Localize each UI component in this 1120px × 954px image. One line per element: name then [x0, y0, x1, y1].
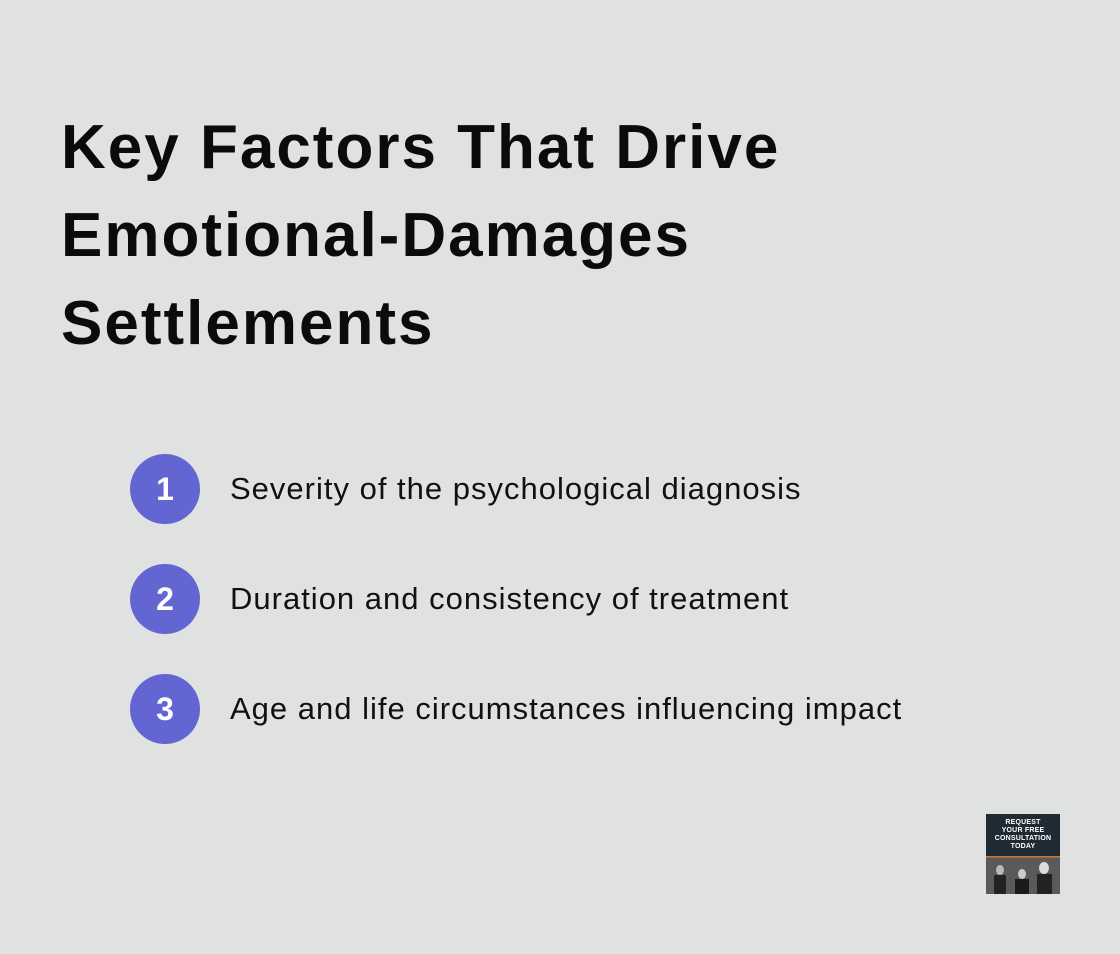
item 2: Duration and consistency of treatment: [230, 581, 789, 616]
item 3: Age and life circumstances influencing impact: [230, 691, 902, 726]
title: Settlements: [61, 289, 434, 358]
item 2: [130, 564, 789, 634]
item 3: [130, 674, 902, 744]
item 1: [130, 454, 801, 524]
badge: consultation: REQUEST: [1005, 819, 1041, 826]
badge: consultation: CONSULTATION: [995, 835, 1051, 842]
item 2: 2: [156, 581, 174, 617]
title: [61, 113, 780, 358]
badge: consultation: TODAY: [1011, 843, 1035, 850]
item 1: 1: [156, 471, 174, 507]
title: Key Factors That Drive: [61, 113, 780, 182]
item 1: Severity of the psychological diagnosis: [230, 471, 801, 506]
badge: consultation: YOUR FREE: [1002, 827, 1044, 834]
badge: consultation: [986, 814, 1060, 894]
title: Emotional-Damages: [61, 201, 691, 270]
item 3: 3: [156, 691, 174, 727]
